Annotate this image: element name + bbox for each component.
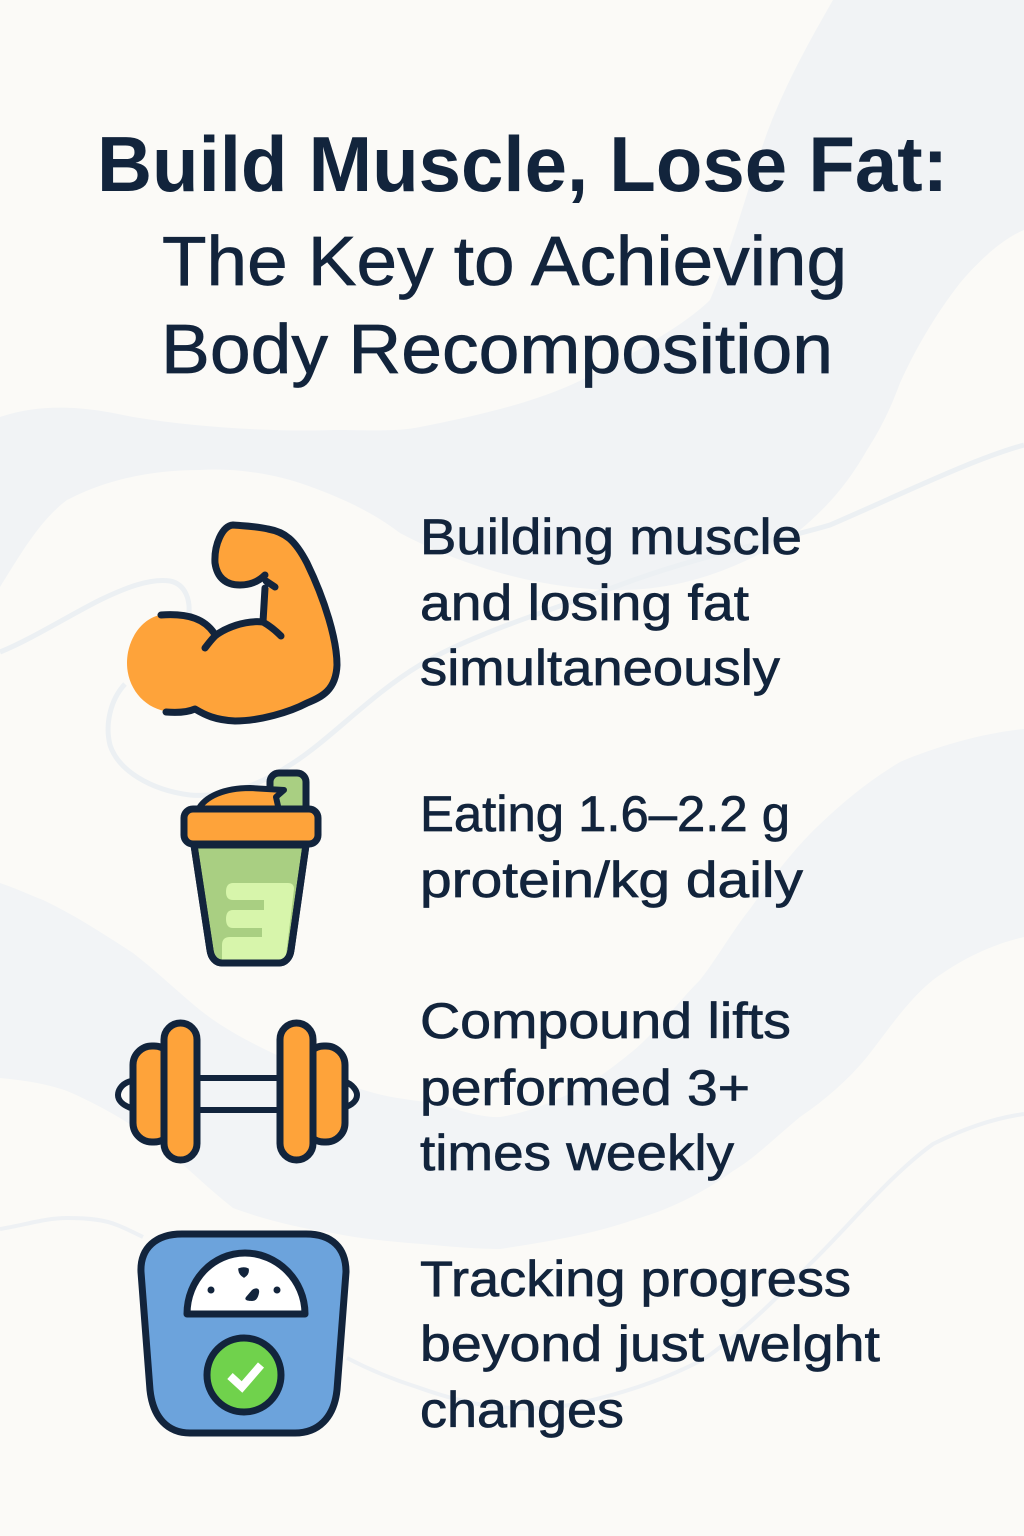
icon: flexed arm [127, 525, 337, 721]
icon: dumbbell [118, 1023, 357, 1160]
bullet text: tracking: changes [420, 1382, 624, 1438]
bullet text: muscle and fat [420, 509, 802, 696]
bullet text: muscle and fat: simultaneously [420, 640, 780, 696]
bullet text: compound lifts: performed 3+ [420, 1060, 750, 1116]
bullet text: protein: protein/kg daily [420, 852, 803, 908]
bullet text: tracking [420, 1251, 880, 1438]
bullet text: tracking: Tracking progress [420, 1251, 851, 1307]
bullet text: muscle and fat: Building muscle [420, 509, 802, 565]
bullet text: compound lifts: times weekly [420, 1125, 734, 1181]
bullet text: protein: Eating 1.6–2.2 g [420, 786, 790, 842]
bullet text: tracking: beyond just welght [420, 1316, 880, 1372]
title [97, 120, 948, 388]
subtitle line 2: The Key to Achieving [162, 222, 847, 300]
bullet text: compound lifts [420, 993, 791, 1181]
bullet text: muscle and fat: and losing fat [420, 575, 749, 631]
icon: bathroom scale [141, 1234, 346, 1433]
bullet text: compound lifts: Compound lifts [420, 993, 791, 1049]
title line 1: Build Muscle, Lose Fat: [97, 120, 948, 208]
subtitle line 3: Body Recomposition [161, 310, 833, 388]
bullet text: protein [420, 786, 803, 908]
icon: protein shaker [184, 773, 318, 963]
